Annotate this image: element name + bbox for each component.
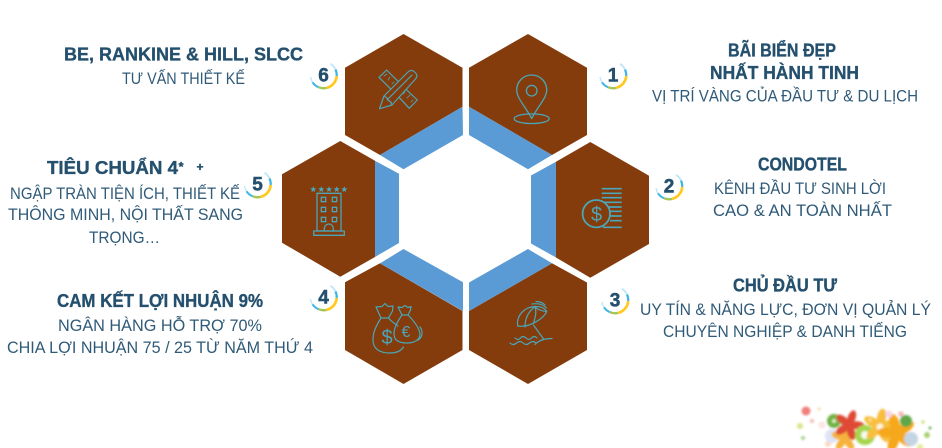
text block 3: developer bbox=[640, 275, 931, 341]
text block 4: profit bbox=[7, 290, 313, 357]
text block 3: developer: CHỦ ĐẦU TƯ bbox=[733, 275, 837, 296]
hexagon 5: hotel standard bbox=[282, 141, 399, 277]
badge 1 bbox=[600, 64, 626, 88]
icon: currency symbols: € bbox=[402, 324, 411, 341]
badge 5: 5 bbox=[252, 174, 263, 196]
text block 1: location: NHẤT HÀNH TINH bbox=[710, 62, 859, 83]
icon: currency symbols: $ bbox=[381, 327, 393, 349]
text block 2: condotel: CONDOTEL bbox=[758, 155, 847, 175]
text block 6: design: TƯ VẤN THIẾT KẾ bbox=[122, 69, 245, 88]
text block 5: standard: NGẬP TRÀN TIỆN ÍCH, THIẾT KẾ bbox=[10, 184, 240, 203]
badge 6: 6 bbox=[318, 66, 329, 86]
icon: money bags bbox=[373, 304, 422, 353]
text block 5: standard: + bbox=[196, 160, 204, 174]
text block 4: profit: CAM KẾT LỢI NHUẬN 9% bbox=[57, 290, 263, 311]
icon: stars bbox=[310, 186, 347, 192]
text block 5: standard bbox=[8, 157, 243, 247]
badge 2 bbox=[656, 175, 682, 199]
badge 4 bbox=[310, 286, 337, 310]
hexagon 4: money bbox=[345, 249, 463, 384]
text block 1: location bbox=[652, 40, 918, 106]
icon: dollar sign: $ bbox=[591, 204, 602, 226]
text block 6: design: BE, RANKINE & HILL, SLCC bbox=[64, 45, 303, 65]
text block 2: condotel: CAO & AN TOÀN NHẤT bbox=[713, 201, 892, 220]
icon: beach umbrella bbox=[510, 302, 552, 344]
badge 6 bbox=[310, 64, 337, 88]
decoration: flower cluster bbox=[797, 405, 932, 448]
icon: five star hotel bbox=[314, 193, 344, 235]
badge 3 bbox=[602, 289, 628, 313]
hexagon 3: beach developer bbox=[469, 249, 587, 384]
badge 4: 4 bbox=[318, 288, 329, 308]
text block 2: condotel bbox=[713, 155, 892, 220]
text block 5: standard: * bbox=[178, 159, 184, 174]
icon: map pin bbox=[514, 75, 549, 123]
badge 5 bbox=[244, 173, 271, 197]
badge 2: 2 bbox=[664, 176, 674, 198]
icon: pencil and ruler bbox=[379, 70, 417, 109]
text block 5: standard: TRỌNG… bbox=[89, 228, 160, 247]
text block 5: standard: TIÊU CHUẨN 4 bbox=[47, 157, 178, 178]
badge 1: 1 bbox=[608, 66, 619, 86]
hexagon 6: design bbox=[345, 34, 463, 169]
text block 5: standard: THÔNG MINH, NỘI THẤT SANG bbox=[8, 205, 243, 224]
hexagon 2: condotel bbox=[531, 142, 649, 278]
text block 4: profit: NGÂN HÀNG HỖ TRỢ 70% bbox=[58, 316, 262, 335]
icon: currency symbols bbox=[381, 324, 411, 349]
hexagon 1: location bbox=[469, 34, 587, 169]
text block 3: developer: CHUYÊN NGHIỆP & DANH TIẾNG bbox=[663, 322, 907, 341]
text block 1: location: BÃI BIỂN ĐẸP bbox=[728, 40, 836, 60]
text block 2: condotel: KÊNH ĐẦU TƯ SINH LỜI bbox=[714, 179, 886, 198]
text block 4: profit: CHIA LỢI NHUẬN 75 / 25 TỪ NĂM THỨ 4 bbox=[7, 338, 313, 357]
badge 3: 3 bbox=[610, 290, 620, 312]
icon: coins bbox=[583, 189, 622, 227]
text block 6: design bbox=[64, 45, 303, 88]
